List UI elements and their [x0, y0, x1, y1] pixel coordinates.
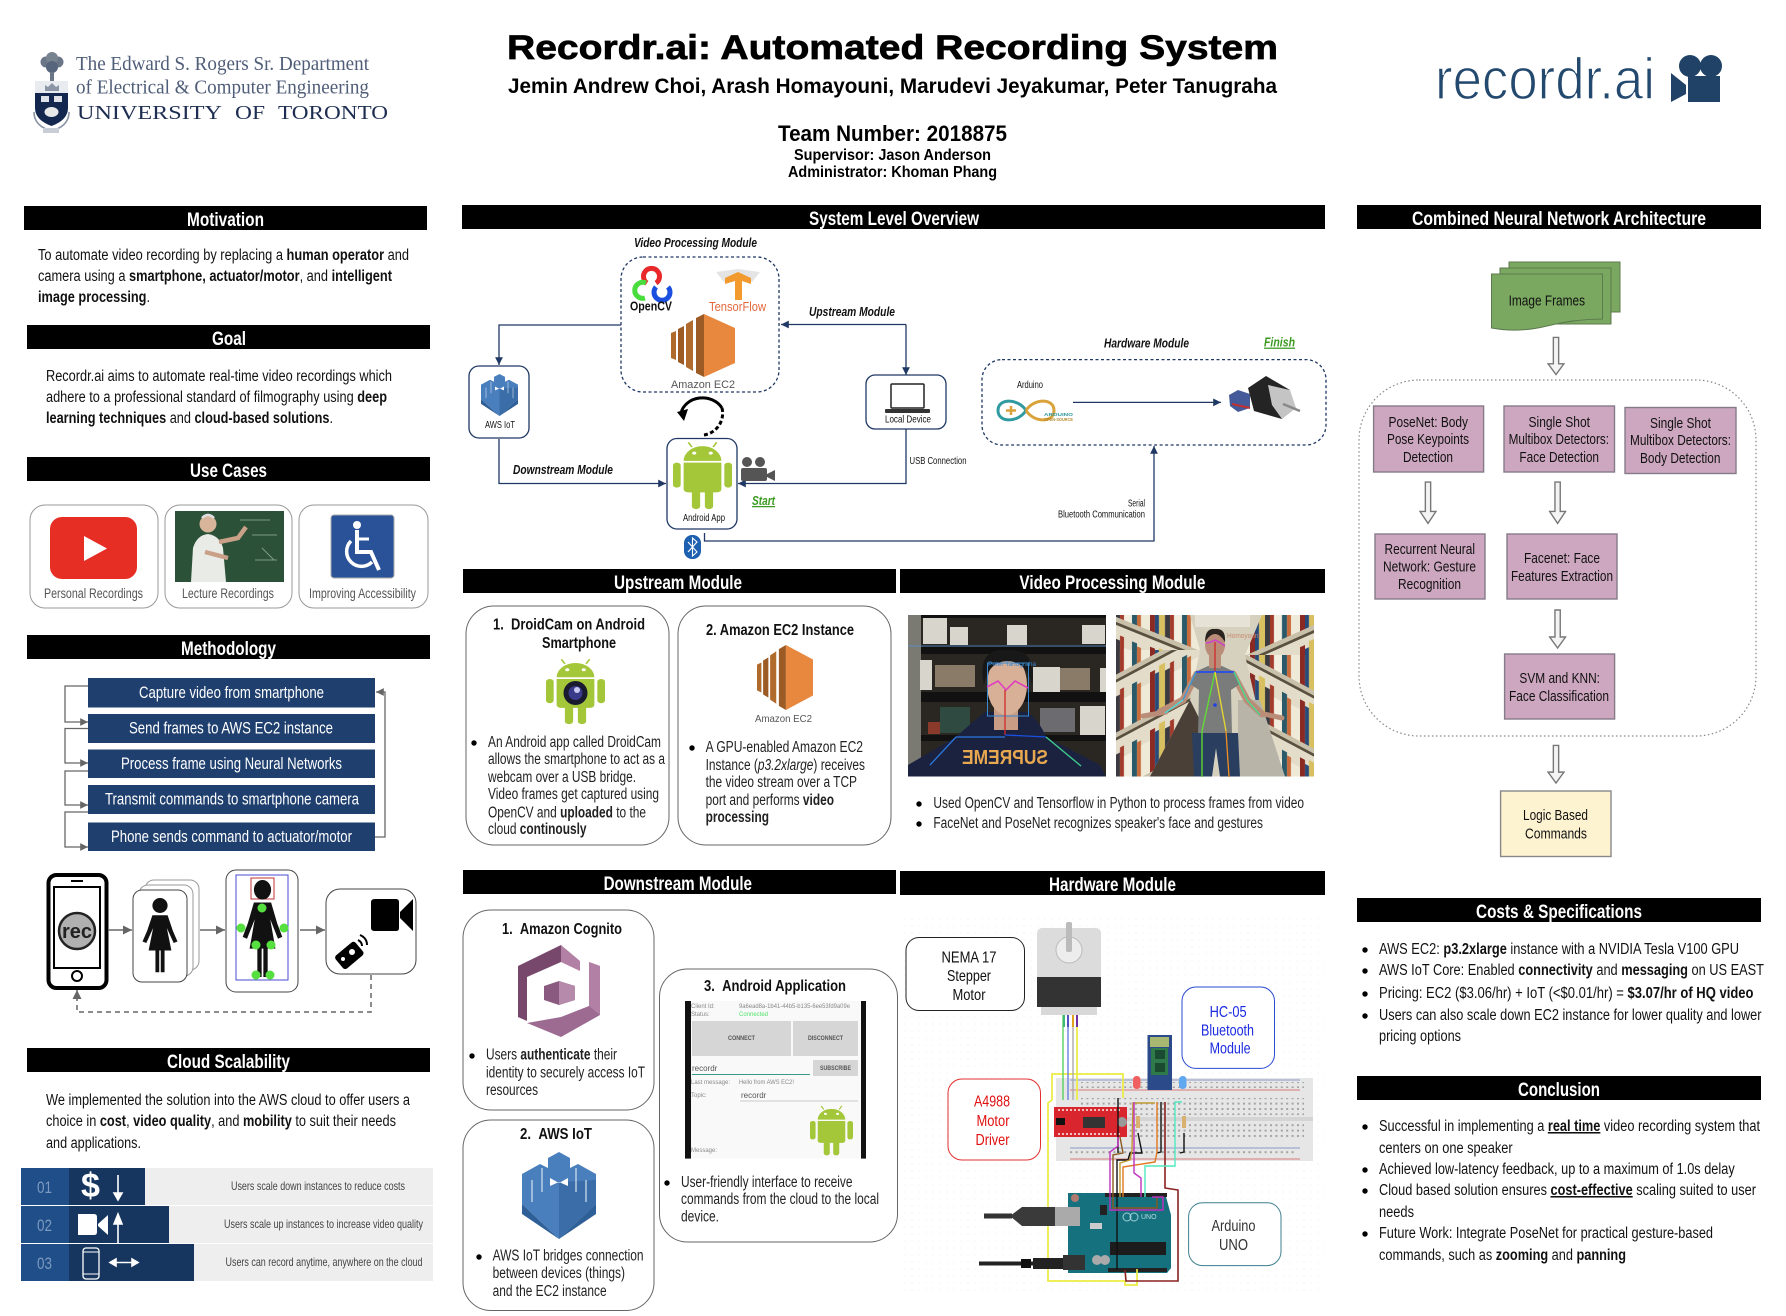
- card: droidcam: Smartphone: [542, 635, 616, 652]
- logo: University of Toronto: The Edward S. Rogers Sr. Department: [76, 53, 369, 75]
- group: hardware module: ARDUINO: [1044, 412, 1074, 417]
- label: hardware module: Hardware Module: [1104, 336, 1189, 350]
- node: svm and knn: SVM and KNN:: [1519, 670, 1600, 687]
- card: amazon cognito: Users authenticate their: [486, 1047, 617, 1064]
- group: neural network stages: [1359, 380, 1756, 736]
- node: posenet: [1374, 406, 1484, 472]
- node: body detection: Body Detection: [1640, 450, 1720, 467]
- card: droidcam: [466, 606, 669, 845]
- label: arduino uno: [1189, 1203, 1281, 1266]
- group: hardware module: [982, 360, 1326, 445]
- panel: methodology: Methodology: [181, 638, 276, 660]
- label: a4988 motor driver: Motor: [976, 1113, 1010, 1130]
- panel: motivation: [24, 206, 427, 306]
- label: hc-05 bluetooth module: [1182, 987, 1274, 1068]
- step 1: [88, 678, 375, 708]
- node: face detection: Single Shot: [1528, 414, 1591, 431]
- screenshot: mobile app: [685, 1001, 866, 1159]
- panel: system level overview: [462, 205, 1326, 559]
- photo: face tracking: [646, 0, 1106, 776]
- label: nema 17 stepper motor: NEMA 17: [942, 950, 997, 967]
- wires: [1048, 1015, 1184, 1285]
- node: body detection: Single Shot: [1650, 415, 1712, 432]
- panel: upstream module: Upstream Module: [614, 572, 742, 594]
- group: cloud modules: Amazon EC2: [671, 379, 735, 391]
- panel: goal: adhere to a professional standard of filmography using deep: [46, 389, 387, 406]
- flow connectors: [65, 686, 385, 847]
- card: improving accessibility: [299, 505, 428, 608]
- diagram: recording pipeline: [48, 870, 416, 1012]
- card: amazon ec2 instance: Amazon EC2: [755, 713, 812, 725]
- group: cloud modules: [621, 257, 779, 392]
- group: hardware module: OPEN-SOURCE: [1044, 417, 1073, 422]
- arrows: [77, 930, 371, 1012]
- label: arduino uno: Arduino: [1212, 1218, 1256, 1235]
- logo: University of Toronto: [34, 52, 388, 133]
- panel: conclusion: centers on one speaker: [1379, 1140, 1513, 1157]
- panel: conclusion: Future Work: Integrate PoseNet for practical gesture-based: [1379, 1225, 1713, 1242]
- power cable: [979, 1255, 1085, 1270]
- label: upstream module: Upstream Module: [809, 305, 895, 319]
- icon: tensorflow: TensorFlow: [709, 300, 767, 314]
- panel: motivation: image processing.: [38, 289, 150, 306]
- icon: amazon ec2: [671, 314, 735, 377]
- row 01: [21, 1167, 433, 1205]
- label: a4988 motor driver: [948, 1079, 1040, 1160]
- card: android application: commands from the cloud to the local: [681, 1191, 879, 1208]
- logo: University of Toronto: UNIVERSITY: [77, 102, 222, 124]
- panel: goal: [27, 325, 430, 427]
- panel: conclusion: needs: [1379, 1204, 1414, 1221]
- screenshot: mobile app: recordr: [692, 1064, 718, 1073]
- panel: costs and specifications: AWS IoT Core: Enabled connectivity and messaging on US EAST: [1379, 962, 1764, 979]
- row 01: Users scale down instances to reduce costs: [231, 1179, 405, 1193]
- component: arduino uno board: UNO: [1141, 1214, 1157, 1221]
- card: droidcam: webcam over a USB bridge.: [487, 769, 636, 786]
- component: arduino uno board: [1068, 1193, 1171, 1273]
- panel: downstream module: Downstream Module: [604, 873, 752, 895]
- panel: upstream module: [463, 569, 896, 845]
- node: recurrent neural network: [1375, 534, 1485, 599]
- photo: pose estimation: [1116, 615, 1314, 777]
- panel: video processing module: Video Processing Module: [1019, 572, 1206, 594]
- screenshot: mobile app: Status:: [691, 1012, 710, 1018]
- label: nema 17 stepper motor: Motor: [952, 987, 986, 1004]
- step 4: [88, 785, 375, 814]
- panel: combined neural network architecture: Combined Neural Network Architecture: [1412, 208, 1706, 230]
- panel: conclusion: commands, such as zooming and panning: [1379, 1247, 1626, 1264]
- logo: University of Toronto: of Electrical & Computer Engineering: [76, 76, 369, 98]
- node: posenet: Detection: [1403, 449, 1453, 466]
- supervisor: Supervisor: Jason Anderson: [794, 147, 991, 164]
- panel: costs and specifications: Costs & Specifications: [1476, 901, 1642, 923]
- label: nema 17 stepper motor: [906, 938, 1024, 1010]
- step 5: [88, 822, 375, 851]
- panel: motivation: Motivation: [187, 209, 264, 231]
- arrow: facenet to classifier: [1550, 610, 1566, 648]
- component: bluetooth board: [1148, 1035, 1172, 1090]
- card: aws iot: between devices (things): [493, 1265, 625, 1282]
- screenshot: mobile app: Client Id:: [691, 1004, 715, 1010]
- icon: video camera: [741, 457, 775, 481]
- image: stepper motor: [1037, 922, 1101, 1027]
- icon: phone: [48, 875, 106, 988]
- node: logic based commands: Logic Based: [1523, 807, 1588, 824]
- panel: costs and specifications: [1357, 898, 1764, 1045]
- component: leds: [1133, 1076, 1186, 1089]
- label: start: Start: [752, 494, 776, 508]
- label: hc-05 bluetooth module: Module: [1210, 1041, 1251, 1058]
- card: aws iot: [463, 1120, 654, 1310]
- label: usb connection: USB Connection: [910, 456, 966, 467]
- panel: conclusion: Successful in implementing a real time video recording system that: [1379, 1118, 1761, 1135]
- logo: University of Toronto: OF: [235, 102, 265, 124]
- row 02: Users scale up instances to increase video quality: [224, 1217, 423, 1231]
- node: android app: Android App: [683, 512, 725, 524]
- screenshot: mobile app: Hello from AWS EC2!: [739, 1080, 794, 1086]
- row 03: [21, 1244, 433, 1281]
- screenshot: mobile app: DISCONNECT: [808, 1036, 843, 1042]
- label: finish: Finish: [1264, 336, 1295, 350]
- photo: pose estimation: Homoyouni: [1227, 631, 1260, 640]
- node: body detection: Multibox Detectors:: [1630, 432, 1731, 449]
- label: serial bluetooth communication: Serial: [1128, 498, 1145, 510]
- node: svm and knn: [1505, 654, 1615, 719]
- label: serial bluetooth communication: Bluetooth Communication: [1058, 510, 1145, 520]
- logo: University of Toronto: TORONTO: [278, 102, 388, 124]
- card: amazon cognito: identity to securely access IoT: [486, 1065, 645, 1082]
- photo: face tracking: Peter Tanugraha: [988, 661, 1036, 668]
- icon: pose detection: [226, 870, 298, 992]
- card: amazon ec2 instance: [678, 606, 891, 845]
- node: face detection: Multibox Detectors:: [1509, 431, 1609, 448]
- title: Recordr.ai: Automated Recording System: [507, 29, 1278, 67]
- label: hc-05 bluetooth module: HC-05: [1210, 1004, 1247, 1021]
- panel: cloud scalability: [21, 1048, 433, 1281]
- panel: cloud scalability: and applications.: [46, 1135, 141, 1152]
- card: aws iot: AWS IoT bridges connection: [493, 1248, 644, 1265]
- card: lecture recordings: Lecture Recordings: [182, 586, 274, 601]
- screenshot: mobile app: recordr: [741, 1091, 767, 1100]
- panel: costs and specifications: Pricing: EC2 ($3.06/hr) + IoT (<$0.01/hr) = $3.07/hr of HQ video: [1379, 985, 1754, 1002]
- panel: video processing module: [646, 0, 1325, 832]
- step 3: Process frame using Neural Networks: [121, 755, 342, 773]
- label: arduino uno: UNO: [1219, 1237, 1248, 1254]
- node: recurrent neural network: Recurrent Neural: [1384, 541, 1475, 558]
- group: hardware module: Arduino: [1017, 379, 1043, 391]
- card: android application: device.: [681, 1209, 719, 1226]
- bullets: Used OpenCV and Tensorflow in Python to process frames from video: [933, 795, 1304, 812]
- node: facenet: Facenet: Face: [1524, 550, 1600, 567]
- node: face detection: Face Detection: [1519, 449, 1599, 466]
- icon: opencv: [630, 268, 673, 314]
- panel: hardware module: [900, 871, 1325, 1296]
- card: amazon ec2 instance: A GPU-enabled Amazon EC2: [706, 739, 863, 756]
- step 1: Capture video from smartphone: [139, 684, 324, 702]
- node: image frames: Image Frames: [1509, 292, 1585, 310]
- card: amazon cognito: 1. Amazon Cognito: [502, 921, 622, 938]
- card: amazon ec2 instance: the video stream over a TCP: [706, 774, 857, 791]
- panel: cloud scalability: choice in cost, video quality, and mobility to suit their needs: [46, 1113, 396, 1130]
- icon: tensorflow: [709, 269, 767, 314]
- bullets: FaceNet and PoseNet recognizes speaker's face and gestures: [933, 815, 1263, 832]
- icon: camera and remote: [326, 889, 416, 974]
- row 02: 02: [37, 1216, 52, 1235]
- card: droidcam: allows the smartphone to act as a: [488, 751, 665, 768]
- icon: android with lens: [546, 659, 605, 724]
- arrow: posenet to rnn: [1420, 482, 1436, 523]
- icon: university crest: [34, 52, 69, 133]
- node: facenet: [1507, 534, 1617, 599]
- card: aws iot: 2. AWS IoT: [520, 1126, 592, 1143]
- icon: stepper motor: [1229, 376, 1300, 419]
- photo: face tracking: SUPREME: [962, 747, 1048, 769]
- label: hc-05 bluetooth module: Bluetooth: [1201, 1023, 1254, 1040]
- node: recurrent neural network: Network: Gesture: [1383, 558, 1476, 576]
- bullets: [916, 795, 1304, 832]
- node: logic based commands: [1501, 791, 1611, 856]
- card: lecture recordings: [165, 505, 292, 608]
- label: nema 17 stepper motor: Stepper: [947, 968, 992, 985]
- node: recurrent neural network: Recognition: [1398, 576, 1461, 593]
- card: improving accessibility: Improving Accessibility: [309, 586, 416, 601]
- arrow: stages to commands: [1548, 745, 1564, 783]
- card: amazon ec2 instance: port and performs video: [706, 792, 834, 809]
- card: aws iot: and the EC2 instance: [493, 1283, 607, 1300]
- panel: motivation: camera using a smartphone, actuator/motor, and intelligent: [38, 268, 392, 285]
- panel: goal: Goal: [212, 328, 246, 350]
- breadboard: [1056, 1078, 1313, 1161]
- card: droidcam: Video frames get captured using: [488, 786, 659, 803]
- screenshot: mobile app: 9a6ead8a-1b41-44b5-b135-6ee53fd9a09e: [739, 1004, 851, 1010]
- node: image frames: [1492, 262, 1620, 330]
- step 2: Send frames to AWS EC2 instance: [129, 720, 333, 738]
- card: amazon ec2 instance: Instance (p3.2xlarge) receives: [706, 757, 865, 774]
- panel: combined neural network architecture: [1357, 205, 1761, 856]
- panel: system level overview: System Level Overview: [809, 208, 980, 230]
- node: svm and knn: Face Classification: [1509, 688, 1609, 705]
- component: resistors: [1136, 1116, 1186, 1128]
- card: droidcam: An Android app called DroidCam: [488, 734, 661, 751]
- card: android application: 3. Android Application: [704, 978, 846, 995]
- panel: hardware module: Hardware Module: [1049, 874, 1176, 896]
- label: downstream module: Downstream Module: [513, 463, 613, 477]
- row 03: 03: [37, 1254, 52, 1273]
- screenshot: mobile app: Last message:: [691, 1080, 730, 1086]
- node: local device: Local Device: [885, 414, 931, 426]
- node: android app: [667, 438, 737, 529]
- node: aws iot: AWS IoT: [485, 419, 515, 431]
- icon: film camera: [1671, 55, 1722, 102]
- card: amazon cognito: resources: [486, 1082, 538, 1099]
- panel: cloud scalability: Cloud Scalability: [167, 1051, 290, 1073]
- connector lines: [499, 324, 1221, 541]
- panel: cloud scalability: We implemented the solution into the AWS cloud to offer users a: [46, 1092, 410, 1109]
- node: posenet: PoseNet: Body: [1388, 414, 1468, 431]
- icon: image frames: [133, 880, 199, 982]
- screenshot: mobile app: SUBSCRIBE: [820, 1066, 851, 1072]
- row 02: [21, 1206, 433, 1243]
- label: a4988 motor driver: Driver: [976, 1132, 1010, 1149]
- card: droidcam: OpenCV and uploaded to the: [488, 804, 646, 822]
- panel: conclusion: Cloud based solution ensures cost-effective scaling suited to user: [1379, 1182, 1756, 1199]
- card: droidcam: cloud continously: [488, 821, 587, 838]
- screenshot: mobile app: Connected: [739, 1012, 768, 1018]
- step 2: [88, 714, 375, 743]
- logo: recordr.ai: recordr.ai: [1435, 47, 1655, 112]
- authors: Jemin Andrew Choi, Arash Homayouni, Marudevi Jeyakumar, Peter Tanugraha: [508, 75, 1277, 98]
- icon: bluetooth: [684, 535, 701, 559]
- panel: use cases: Use Cases: [190, 460, 267, 482]
- row 01: 01: [37, 1178, 52, 1197]
- step 4: Transmit commands to smartphone camera: [105, 790, 360, 808]
- panel: conclusion: [1357, 1076, 1761, 1264]
- icon: opencv: OpenCV: [630, 300, 673, 314]
- panel: methodology: [27, 635, 430, 851]
- node: facenet: Features Extraction: [1511, 568, 1613, 585]
- node: body detection: [1625, 408, 1736, 474]
- step 5: Phone sends command to actuator/motor: [111, 828, 352, 846]
- card: personal recordings: Personal Recordings: [44, 586, 143, 601]
- arrow: frames to detectors: [1548, 337, 1564, 375]
- row 03: Users can record anytime, anywhere on the cloud: [226, 1255, 422, 1269]
- panel: conclusion: Conclusion: [1518, 1079, 1600, 1101]
- screenshot: mobile app: Topic:: [691, 1093, 707, 1099]
- card: amazon ec2 instance: 2. Amazon EC2 Instance: [706, 622, 854, 639]
- icon: cycle arrow: [677, 398, 723, 435]
- card: personal recordings: [30, 505, 158, 608]
- panel: downstream module: [463, 870, 898, 1310]
- step 3: [88, 750, 375, 778]
- node: aws iot: [469, 366, 529, 438]
- icon: phone: rec: [62, 921, 92, 943]
- administrator: Administrator: Khoman Phang: [788, 164, 997, 181]
- card: droidcam: 1. DroidCam on Android: [493, 616, 645, 634]
- label: video processing module: Video Processing Module: [634, 236, 757, 250]
- card: android application: [660, 969, 898, 1242]
- panel: goal: learning techniques and cloud-based solutions.: [46, 410, 333, 427]
- label: serial bluetooth communication: [1058, 498, 1145, 520]
- node: logic based commands: Commands: [1525, 826, 1587, 842]
- icon: arduino logo: [998, 401, 1054, 420]
- node: posenet: Pose Keypoints: [1387, 431, 1469, 448]
- panel: motivation: To automate video recording by replacing a human operator and: [38, 247, 409, 264]
- panel: goal: Recordr.ai aims to automate real-time video recordings which: [46, 368, 392, 385]
- usb cable: [984, 1207, 1080, 1226]
- panel: costs and specifications: AWS EC2: p3.2xlarge instance with a NVIDIA Tesla V100 GPU: [1379, 941, 1739, 958]
- card: amazon ec2 instance: processing: [706, 809, 769, 826]
- team number: Team Number: 2018875: [778, 121, 1007, 146]
- panel: use cases: [27, 457, 430, 608]
- row 01: $: [81, 1167, 100, 1205]
- card: android application: User-friendly interface to receive: [681, 1174, 852, 1191]
- arrow: detection to facenet: [1550, 482, 1566, 523]
- panel: costs and specifications: pricing options: [1379, 1028, 1461, 1045]
- screenshot: mobile app: Message:: [691, 1148, 717, 1154]
- screenshot: mobile app: CONNECT: [728, 1036, 755, 1042]
- node: face detection: [1504, 406, 1614, 472]
- node: local device: [866, 375, 946, 429]
- card: amazon cognito: [463, 910, 654, 1110]
- label: a4988 motor driver: A4988: [974, 1094, 1010, 1111]
- component: motor driver board: [1054, 1107, 1127, 1137]
